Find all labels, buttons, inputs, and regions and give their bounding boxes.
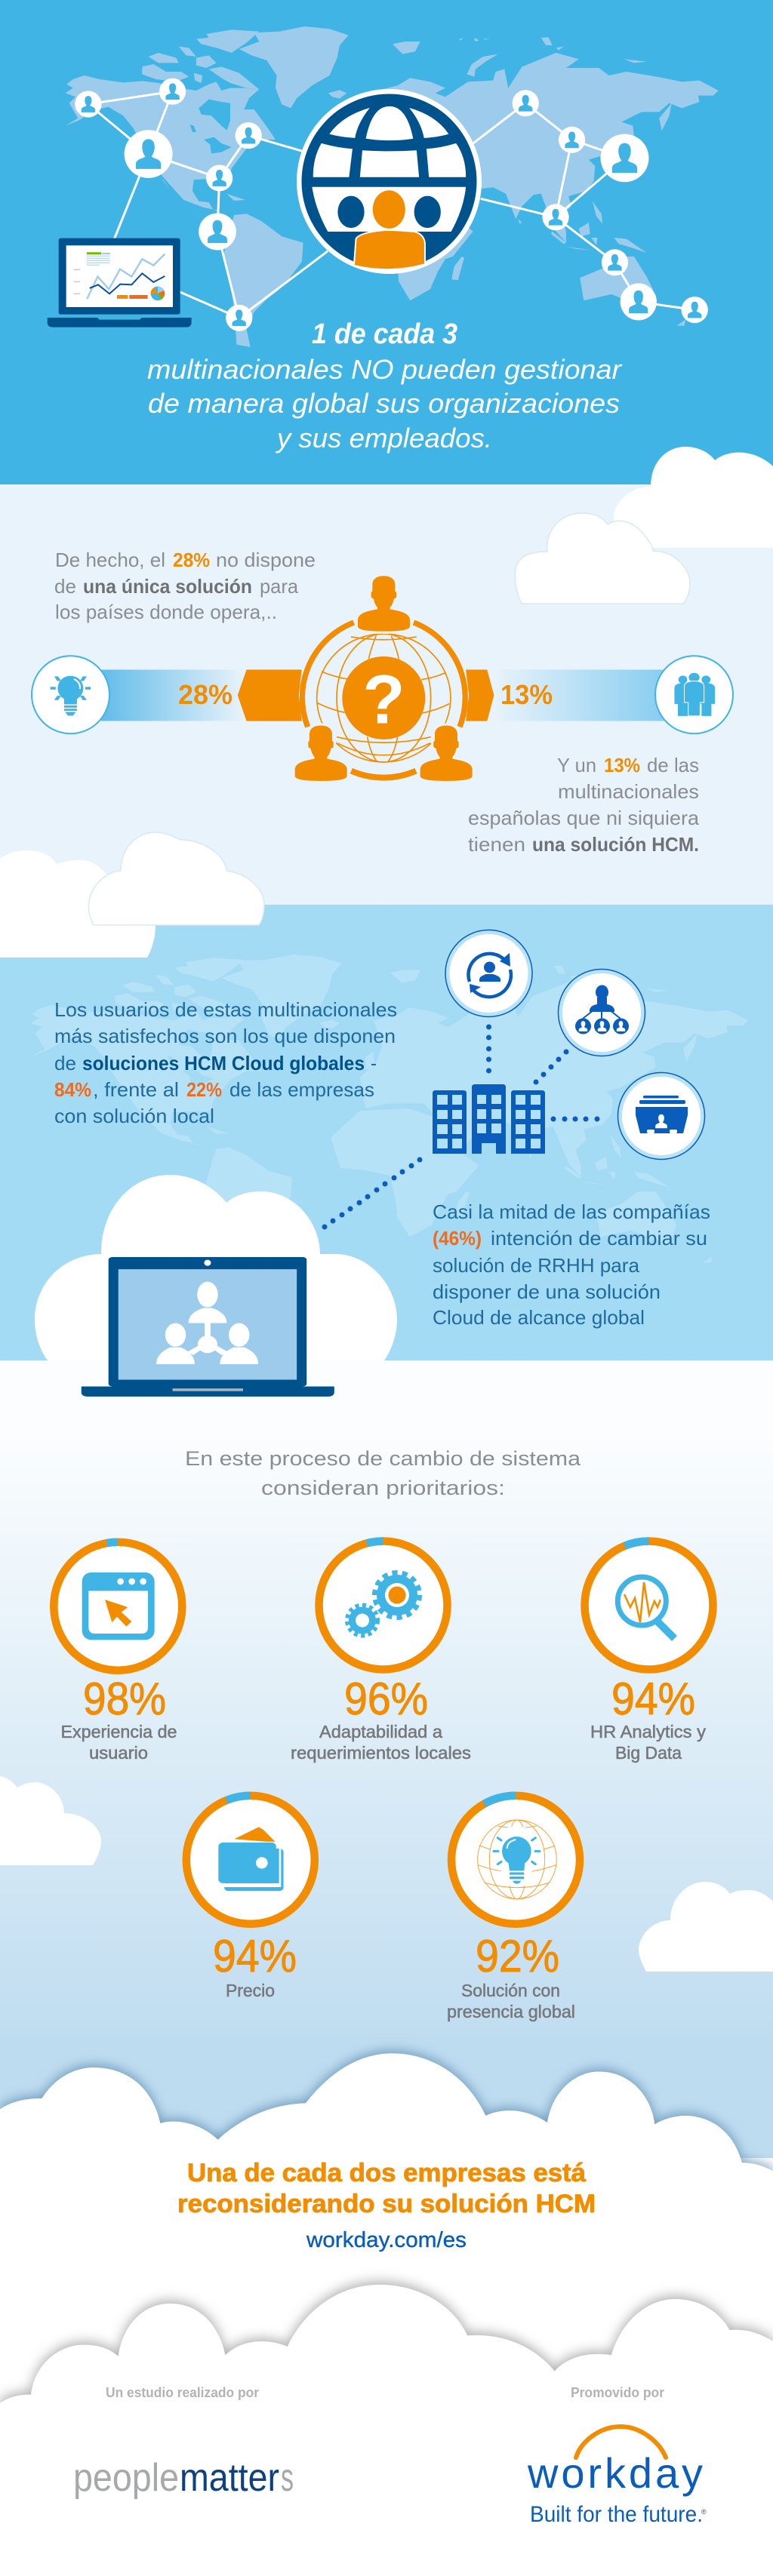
text: 28 percent: 28% bbox=[173, 549, 210, 571]
heading: En este proceso de cambio de sistema bbox=[185, 1447, 581, 1470]
logo: workday: workday bbox=[527, 2449, 703, 2497]
text: 28 percent: De hecho, el bbox=[55, 549, 165, 571]
headline: multinacionales NO pueden gestionar bbox=[147, 354, 623, 385]
call to action: reconsiderando su solución HCM bbox=[177, 2190, 596, 2218]
logo: peoplematters: matter bbox=[180, 2456, 279, 2500]
priority: HR analytics: 94% bbox=[611, 1674, 695, 1724]
panel: footer clouds bbox=[0, 2037, 773, 2576]
priority: user experience: usuario bbox=[89, 1743, 148, 1763]
priority: price: 94% bbox=[213, 1931, 297, 1981]
priority: HR analytics: Big Data bbox=[615, 1743, 682, 1763]
faint world map bbox=[31, 954, 748, 1285]
panel: blue header bbox=[0, 0, 773, 484]
priority: HR analytics: HR Analytics y bbox=[590, 1722, 707, 1741]
headline: de manera global sus organizaciones bbox=[148, 388, 620, 419]
icon: orange globe with question mark and people bbox=[295, 576, 473, 781]
text: almost half: Casi la mitad de las compañías bbox=[433, 1200, 710, 1223]
text: 13 percent: tienen bbox=[468, 833, 525, 856]
text: satisfied users: , frente al bbox=[93, 1078, 179, 1101]
text: satisfied users: - bbox=[371, 1052, 377, 1074]
priority: price: Precio bbox=[226, 1981, 275, 2000]
icon: card file bbox=[617, 1073, 705, 1159]
text: satisfied users: de las empresas bbox=[229, 1078, 374, 1101]
text: 13 percent: españolas que ni siquiera bbox=[468, 807, 700, 829]
call to action bbox=[177, 2159, 596, 2252]
stat 28%: 28% bbox=[178, 679, 233, 710]
logo: peoplematters bbox=[73, 2456, 294, 2500]
icon: office buildings bbox=[433, 1084, 545, 1154]
text: almost half: Cloud de alcance global bbox=[433, 1306, 645, 1329]
text: 13 percent: multinacionales bbox=[558, 780, 699, 803]
text: 13 percent: de las bbox=[647, 754, 699, 776]
priority: price bbox=[167, 1776, 334, 2000]
priority: global presence: 92% bbox=[476, 1931, 559, 1981]
panel: cloud HCM solutions bbox=[0, 832, 773, 1360]
text: satisfied users bbox=[54, 998, 397, 1127]
lower cloud bbox=[0, 2285, 773, 2576]
logo: peoplematters: people bbox=[73, 2456, 179, 2500]
icon: group of people bbox=[655, 656, 733, 733]
icon: organisation hierarchy bbox=[559, 969, 645, 1056]
priority: local adaptability: 96% bbox=[344, 1674, 428, 1724]
logo: peoplematters: s bbox=[281, 2456, 294, 2500]
priority: user experience bbox=[44, 1532, 192, 1763]
text: 28 percent: de bbox=[54, 575, 76, 598]
dotted connectors bbox=[322, 1025, 599, 1230]
text: satisfied users: 22% bbox=[186, 1078, 222, 1101]
text: 13 percent: Y un bbox=[557, 754, 596, 776]
clouds bbox=[0, 1776, 773, 1972]
left gradient bar bbox=[101, 670, 245, 721]
logo: workday bbox=[527, 2427, 707, 2527]
text: satisfied users: Los usuarios de estas multinacionales bbox=[54, 998, 397, 1021]
panel: lack of a single solution bbox=[0, 447, 773, 905]
right gradient bar bbox=[493, 670, 665, 721]
logo: workday: Built for the future. bbox=[530, 2502, 703, 2527]
text: 13 percent: 13% bbox=[604, 754, 640, 776]
network people nodes bbox=[75, 78, 708, 331]
priority: local adaptability: Adaptabilidad a bbox=[319, 1722, 442, 1741]
arrow shapes bbox=[238, 669, 494, 721]
priority: global presence: Solución con bbox=[461, 1981, 560, 2000]
call to action: Una de cada dos empresas está bbox=[187, 2159, 586, 2187]
text: 13 percent bbox=[468, 754, 700, 856]
priority: local adaptability: requerimientos locales bbox=[291, 1743, 471, 1763]
priority: global presence: presencia global bbox=[447, 2002, 575, 2021]
priority: global presence bbox=[429, 1772, 602, 2021]
text: almost half: solución de RRHH para bbox=[433, 1254, 640, 1277]
headline: y sus empleados. bbox=[275, 423, 492, 453]
headline bbox=[147, 318, 623, 453]
panel: priorities bbox=[0, 1175, 773, 2055]
clouds bottom left of previous panel bbox=[0, 832, 264, 958]
cloud behind laptop bbox=[35, 1175, 397, 1360]
text: satisfied users: más satisfechos son los que disponen bbox=[54, 1025, 396, 1047]
text: 28 percent: para bbox=[260, 575, 299, 598]
world map bbox=[66, 26, 719, 347]
icon: laptop with team bbox=[82, 1257, 334, 1397]
text: 28 percent: los países donde opera,.. bbox=[55, 601, 277, 623]
icon: orange globe with question mark and people: ? bbox=[362, 661, 405, 738]
text: 28 percent: una única solución bbox=[83, 575, 252, 598]
icon: person with sync arrows bbox=[445, 930, 532, 1017]
text: almost half: intención de cambiar su bbox=[491, 1227, 707, 1250]
text: satisfied users: soluciones HCM Cloud globales bbox=[82, 1052, 365, 1074]
headline: 1 de cada 3 bbox=[312, 318, 457, 350]
heading: consideran prioritarios: bbox=[261, 1477, 505, 1499]
logo: workday: ® bbox=[701, 2508, 707, 2516]
text: 28 percent: no dispone bbox=[216, 549, 316, 571]
call to action: workday.com/es bbox=[306, 2228, 467, 2252]
priority: local adaptability bbox=[291, 1527, 471, 1763]
priority: user experience: 98% bbox=[83, 1674, 166, 1724]
clouds top right bbox=[515, 447, 773, 604]
text: satisfied users: de bbox=[54, 1052, 76, 1074]
text: almost half: disponer de una solución bbox=[433, 1280, 661, 1303]
network lines bbox=[88, 91, 694, 318]
text: 13 percent: una solución HCM. bbox=[532, 833, 699, 856]
priority: user experience: Experiencia de bbox=[60, 1722, 177, 1741]
text: almost half: (46%) bbox=[433, 1227, 482, 1250]
stat 13%: 13% bbox=[500, 679, 553, 710]
credit: study by: Un estudio realizado por bbox=[106, 2385, 259, 2400]
icon: laptop with charts bbox=[48, 238, 192, 327]
text: almost half bbox=[433, 1200, 710, 1329]
text: satisfied users: con solución local bbox=[54, 1105, 214, 1127]
priority: HR analytics bbox=[565, 1522, 732, 1763]
icon: globe with people bbox=[297, 89, 482, 274]
text: 28 percent bbox=[54, 549, 316, 623]
upper cloud bbox=[0, 2053, 773, 2415]
text: satisfied users: 84% bbox=[54, 1078, 91, 1101]
credit: promoted by: Promovido por bbox=[571, 2385, 664, 2400]
icon: light bulb bbox=[32, 656, 109, 733]
heading bbox=[185, 1447, 581, 1499]
